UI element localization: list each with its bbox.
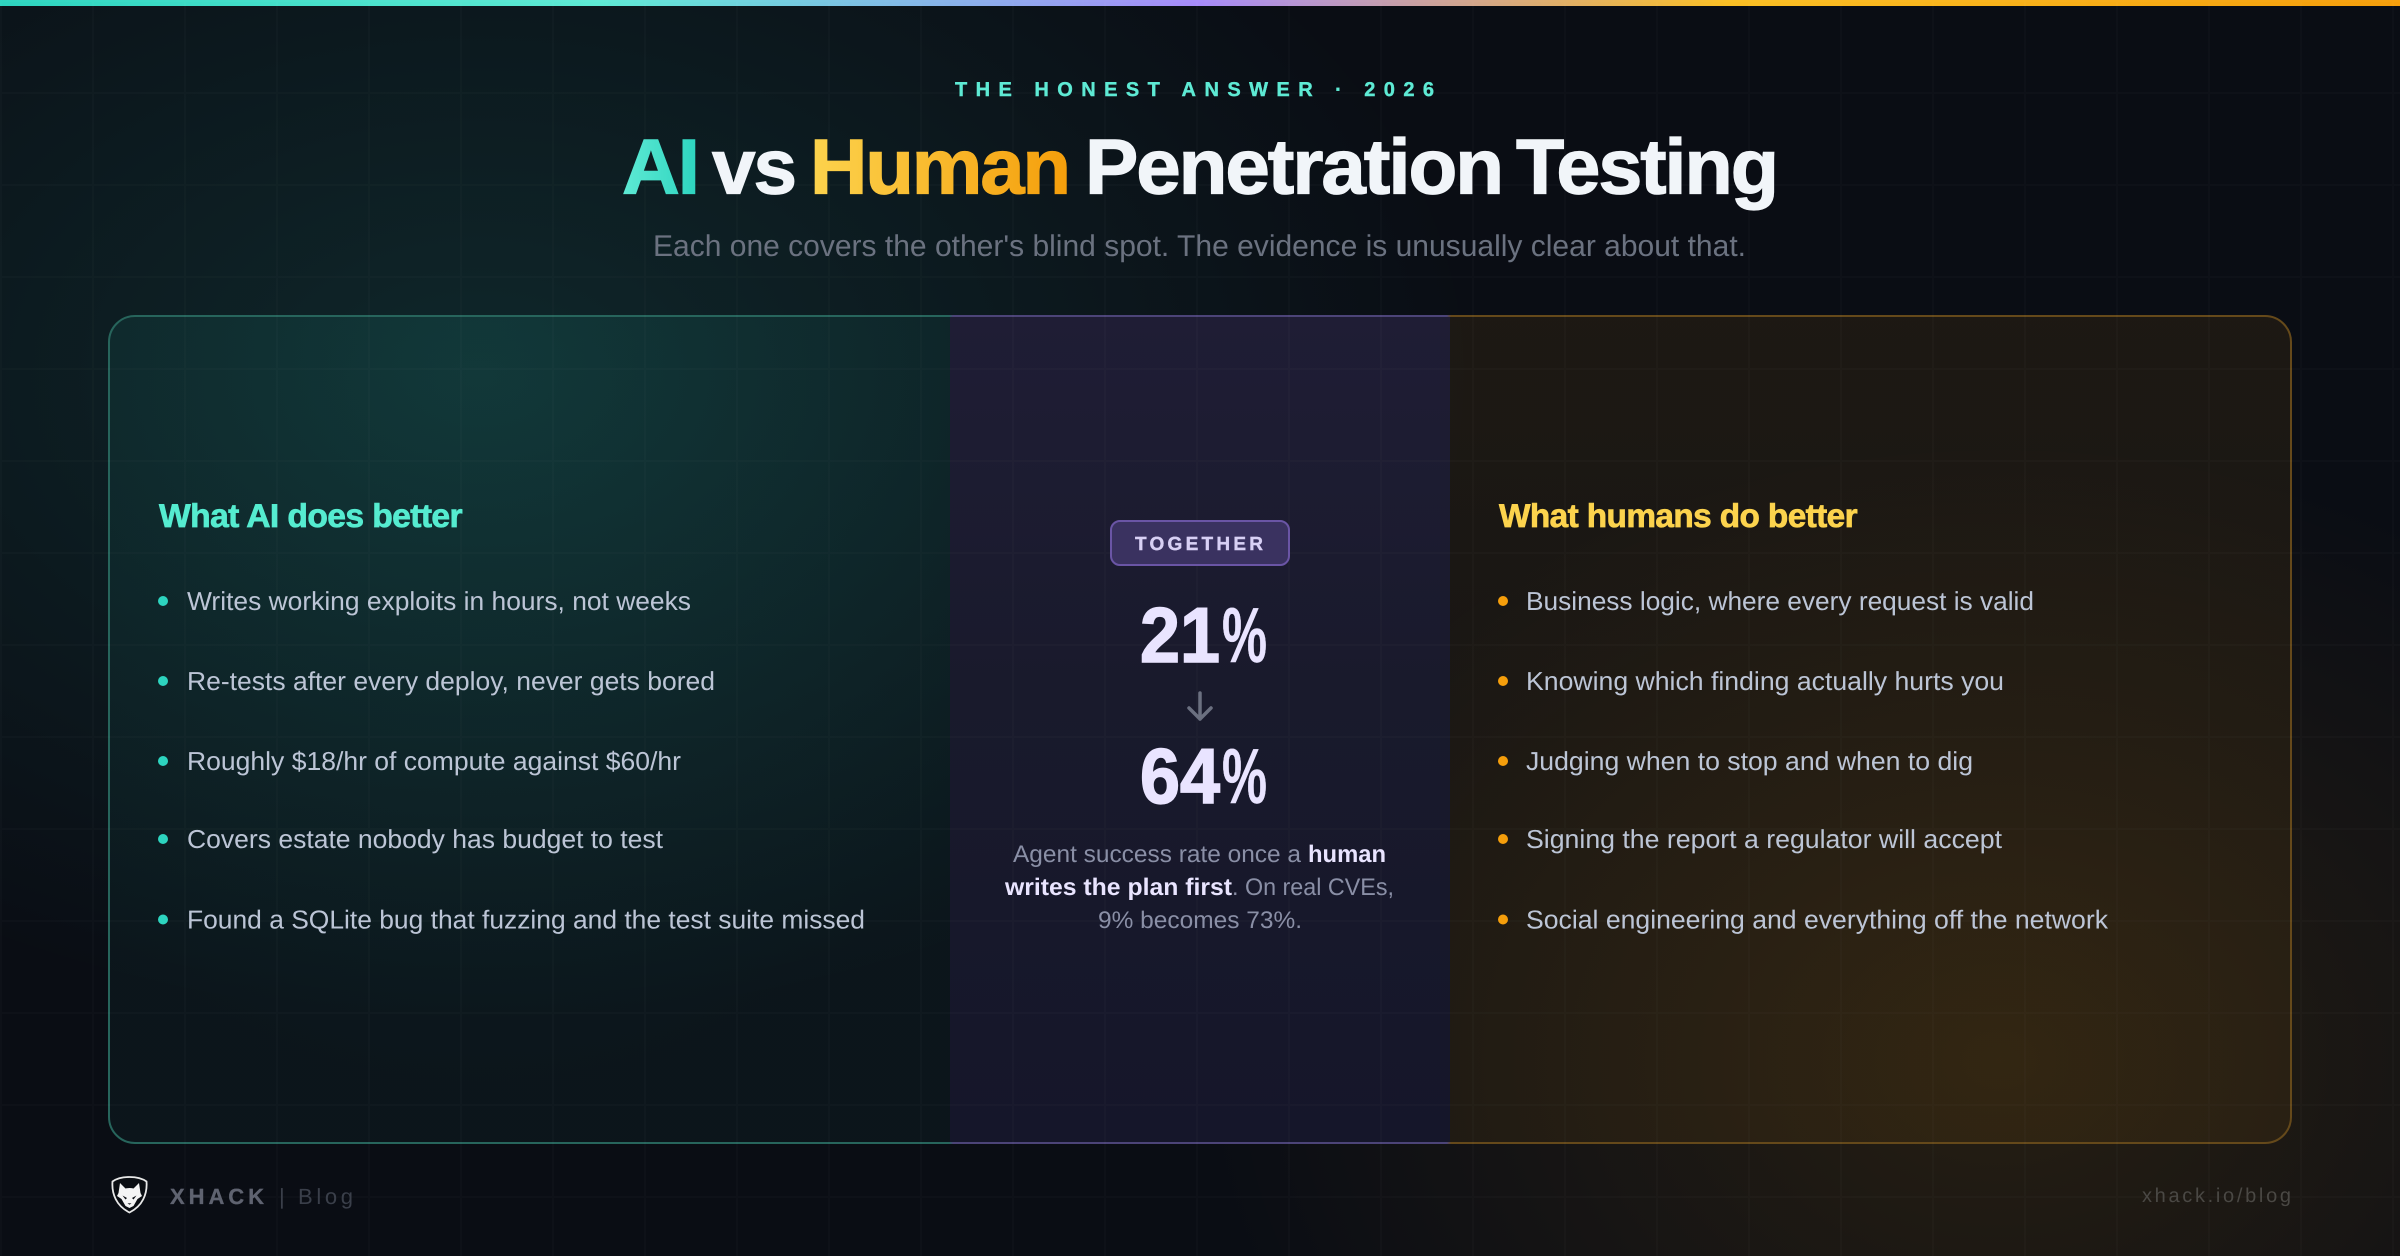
divider and label: Blog: | [279, 1184, 285, 1209]
panel: what AI does better [158, 497, 865, 934]
heading: AI: What AI does better [159, 497, 463, 534]
panel: what humans do better [1498, 497, 2109, 934]
list item: Covers estate nobody has budget to test [187, 824, 664, 854]
list item: Signing the report a regulator will accept [1526, 824, 2003, 854]
url: xhack.io/blog [2142, 1185, 2291, 1207]
caption: writes the plan first [1004, 874, 1232, 901]
list item: Knowing which finding actually hurts you [1526, 666, 2004, 696]
title: Testing [1516, 122, 1777, 210]
divider and label: Blog: Blog [298, 1184, 353, 1209]
list item: Re-tests after every deploy, never gets bored [187, 666, 715, 696]
header [622, 79, 1777, 263]
icon: wolf shield logo [112, 1177, 147, 1212]
caption: Agent success rate once a [1013, 841, 1302, 868]
panel: AI column background [109, 316, 950, 1143]
panel: together [1004, 521, 1394, 934]
caption [1004, 841, 1394, 934]
caption: human [1308, 841, 1386, 868]
panel: comparison card [109, 316, 2291, 1143]
list item: Judging when to stop and when to dig [1526, 746, 1973, 776]
list item: Found a SQLite bug that fuzzing and the test suite missed [187, 904, 865, 934]
subtitle: Each one covers the other's blind spot. The evidence is unusually clear about that. [653, 230, 1746, 263]
brand: XHACK: XHACK [170, 1184, 264, 1209]
list item: Writes working exploits in hours, not weeks [187, 586, 691, 616]
badge: together: TOGETHER [1135, 534, 1263, 555]
title: Penetration [1085, 122, 1502, 210]
caption: 9% becomes 73%. [1098, 907, 1302, 934]
badge: together [1111, 521, 1289, 565]
panel: together column background [950, 316, 1450, 1143]
arrow: down [1189, 693, 1211, 719]
footer [112, 1177, 2291, 1212]
list item: Business logic, where every request is valid [1526, 586, 2034, 616]
stat: 21%: % [1222, 591, 1267, 679]
title: AI [622, 122, 698, 210]
stat: 64%: 64 [1140, 732, 1220, 820]
list item: Social engineering and everything off the network [1526, 904, 2109, 934]
stat: 21%: 21 [1140, 591, 1220, 679]
heading: humans: What humans do better [1499, 497, 1858, 534]
list item: Roughly $18/hr of compute against $60/hr [187, 746, 681, 776]
eyebrow: THE HONEST ANSWER · 2026 [955, 79, 1434, 101]
stat: 64%: % [1222, 732, 1267, 820]
panel: human column background [1450, 316, 2291, 1143]
top gradient bar [0, 0, 2400, 6]
title: Human [810, 122, 1069, 210]
caption: . On real CVEs, [1232, 874, 1394, 901]
title: vs [712, 122, 795, 210]
